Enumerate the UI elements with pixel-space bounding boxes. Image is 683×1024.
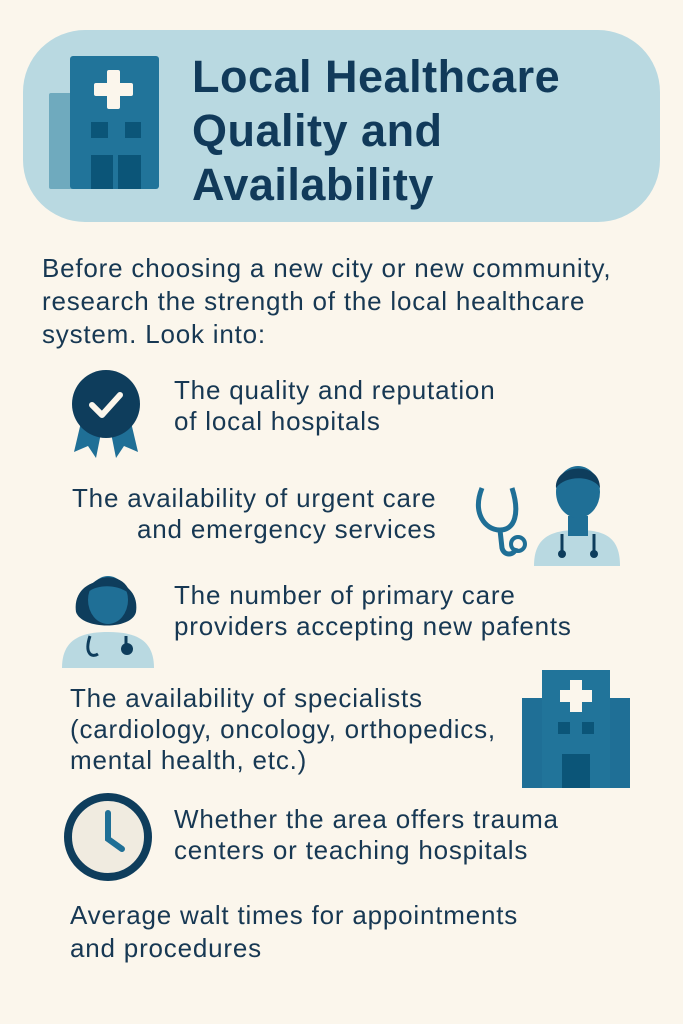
intro text xyxy=(42,253,611,349)
icon: clock xyxy=(64,793,152,881)
icon: hospital building xyxy=(49,56,159,189)
title xyxy=(192,51,560,210)
item 6: Average walt times for appointments xyxy=(70,900,518,930)
item 1: of local hospitals xyxy=(174,406,381,436)
item 3: providers accepting new pafents xyxy=(174,611,572,641)
item 5 xyxy=(174,804,559,865)
title: Availability xyxy=(192,159,434,210)
item 3: The number of primary care xyxy=(174,580,516,610)
intro text: research the strength of the local healthcare xyxy=(42,286,585,316)
icon: hospital building small xyxy=(522,670,630,788)
intro text: system. Look into: xyxy=(42,319,266,349)
title: Quality and xyxy=(192,105,443,156)
icon: badge xyxy=(72,370,140,458)
icon: stethoscope and doctor xyxy=(476,466,620,566)
intro text: Before choosing a new city or new community, xyxy=(42,253,611,283)
item 5: centers or teaching hospitals xyxy=(174,835,528,865)
item 1 xyxy=(174,375,495,436)
icon: female doctor xyxy=(62,576,154,668)
item 2: and emergency services xyxy=(137,514,436,544)
item 4: (cardiology, oncology, orthopedics, xyxy=(70,714,496,744)
item 4: mental health, etc.) xyxy=(70,745,307,775)
item 6: and procedures xyxy=(70,933,262,963)
item 6 xyxy=(70,900,518,963)
header panel xyxy=(23,30,660,222)
title: Local Healthcare xyxy=(192,51,560,102)
item 4: The availability of specialists xyxy=(70,683,423,713)
item 3 xyxy=(174,580,572,641)
item 2 xyxy=(72,483,436,544)
item 4 xyxy=(70,683,496,775)
item 2: The availability of urgent care xyxy=(72,483,436,513)
item 5: Whether the area offers trauma xyxy=(174,804,559,834)
item 1: The quality and reputation xyxy=(174,375,495,405)
